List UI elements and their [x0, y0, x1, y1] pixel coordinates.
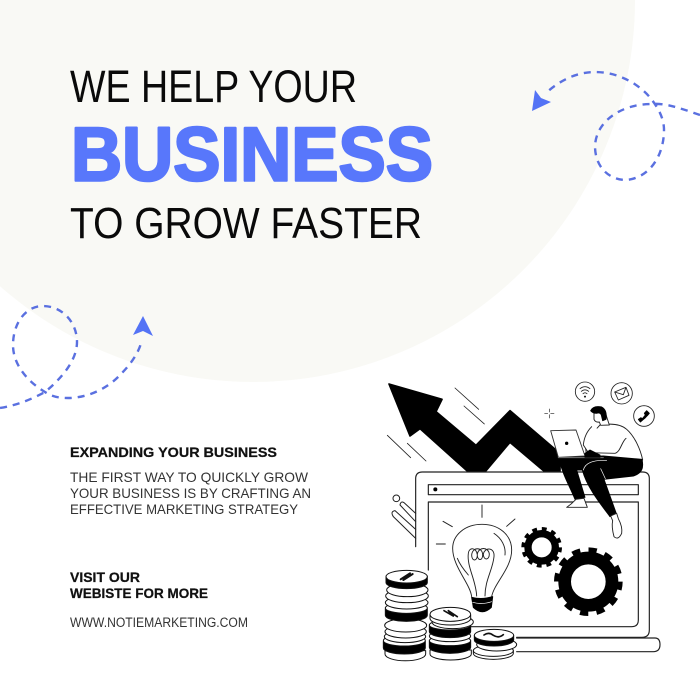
background circle [0, 0, 635, 382]
dashed arrow: bottom left [0, 306, 153, 408]
icon: mail [611, 383, 632, 404]
body text [70, 469, 311, 517]
section heading: EXPANDING YOUR BUSINESS [70, 444, 277, 460]
laptop lid [551, 430, 585, 457]
call to action [70, 569, 208, 601]
illustration [383, 382, 660, 661]
shoe right [611, 513, 622, 538]
icon: wifi [575, 382, 595, 401]
arm [583, 427, 626, 453]
title [70, 61, 433, 248]
coin stack middle [429, 607, 473, 660]
decorative lines left [392, 495, 416, 538]
trousers [558, 456, 643, 517]
head [594, 413, 609, 425]
growth arrow [389, 384, 560, 472]
screen [428, 502, 638, 627]
coin stacks [383, 570, 517, 661]
body text: YOUR BUSINESS IS BY CRAFTING AN [70, 485, 311, 501]
coin stack right [473, 629, 517, 659]
icon: phone [634, 406, 654, 426]
title highlight: BUSINESS [71, 112, 433, 198]
coin top [474, 629, 514, 641]
torso [585, 424, 643, 460]
title line 3: TO GROW FASTER [70, 199, 422, 248]
light bulb [436, 505, 515, 612]
body text: EFFECTIVE MARKETING STRATEGY [70, 501, 299, 517]
coin stack left [383, 570, 428, 661]
large gear [557, 550, 620, 613]
laptop base [517, 638, 660, 652]
shoe left [567, 498, 587, 507]
call to action: WEBISTE FOR MORE [70, 585, 208, 601]
hair [591, 407, 606, 421]
dashed arrow: top right [532, 72, 700, 180]
person [551, 407, 643, 538]
body text: THE FIRST WAY TO QUICKLY GROW [70, 469, 309, 485]
coin top [386, 570, 427, 583]
small gear [523, 529, 560, 566]
coin top [430, 607, 471, 621]
website url: WWW.NOTIEMARKETING.COM [70, 615, 248, 630]
call to action: VISIT OUR [70, 569, 140, 585]
laptop frame [416, 472, 649, 637]
address bar [428, 485, 638, 495]
title line 1: WE HELP YOUR [70, 61, 357, 112]
icon: sparkle [545, 409, 554, 418]
speed lines [387, 388, 484, 461]
